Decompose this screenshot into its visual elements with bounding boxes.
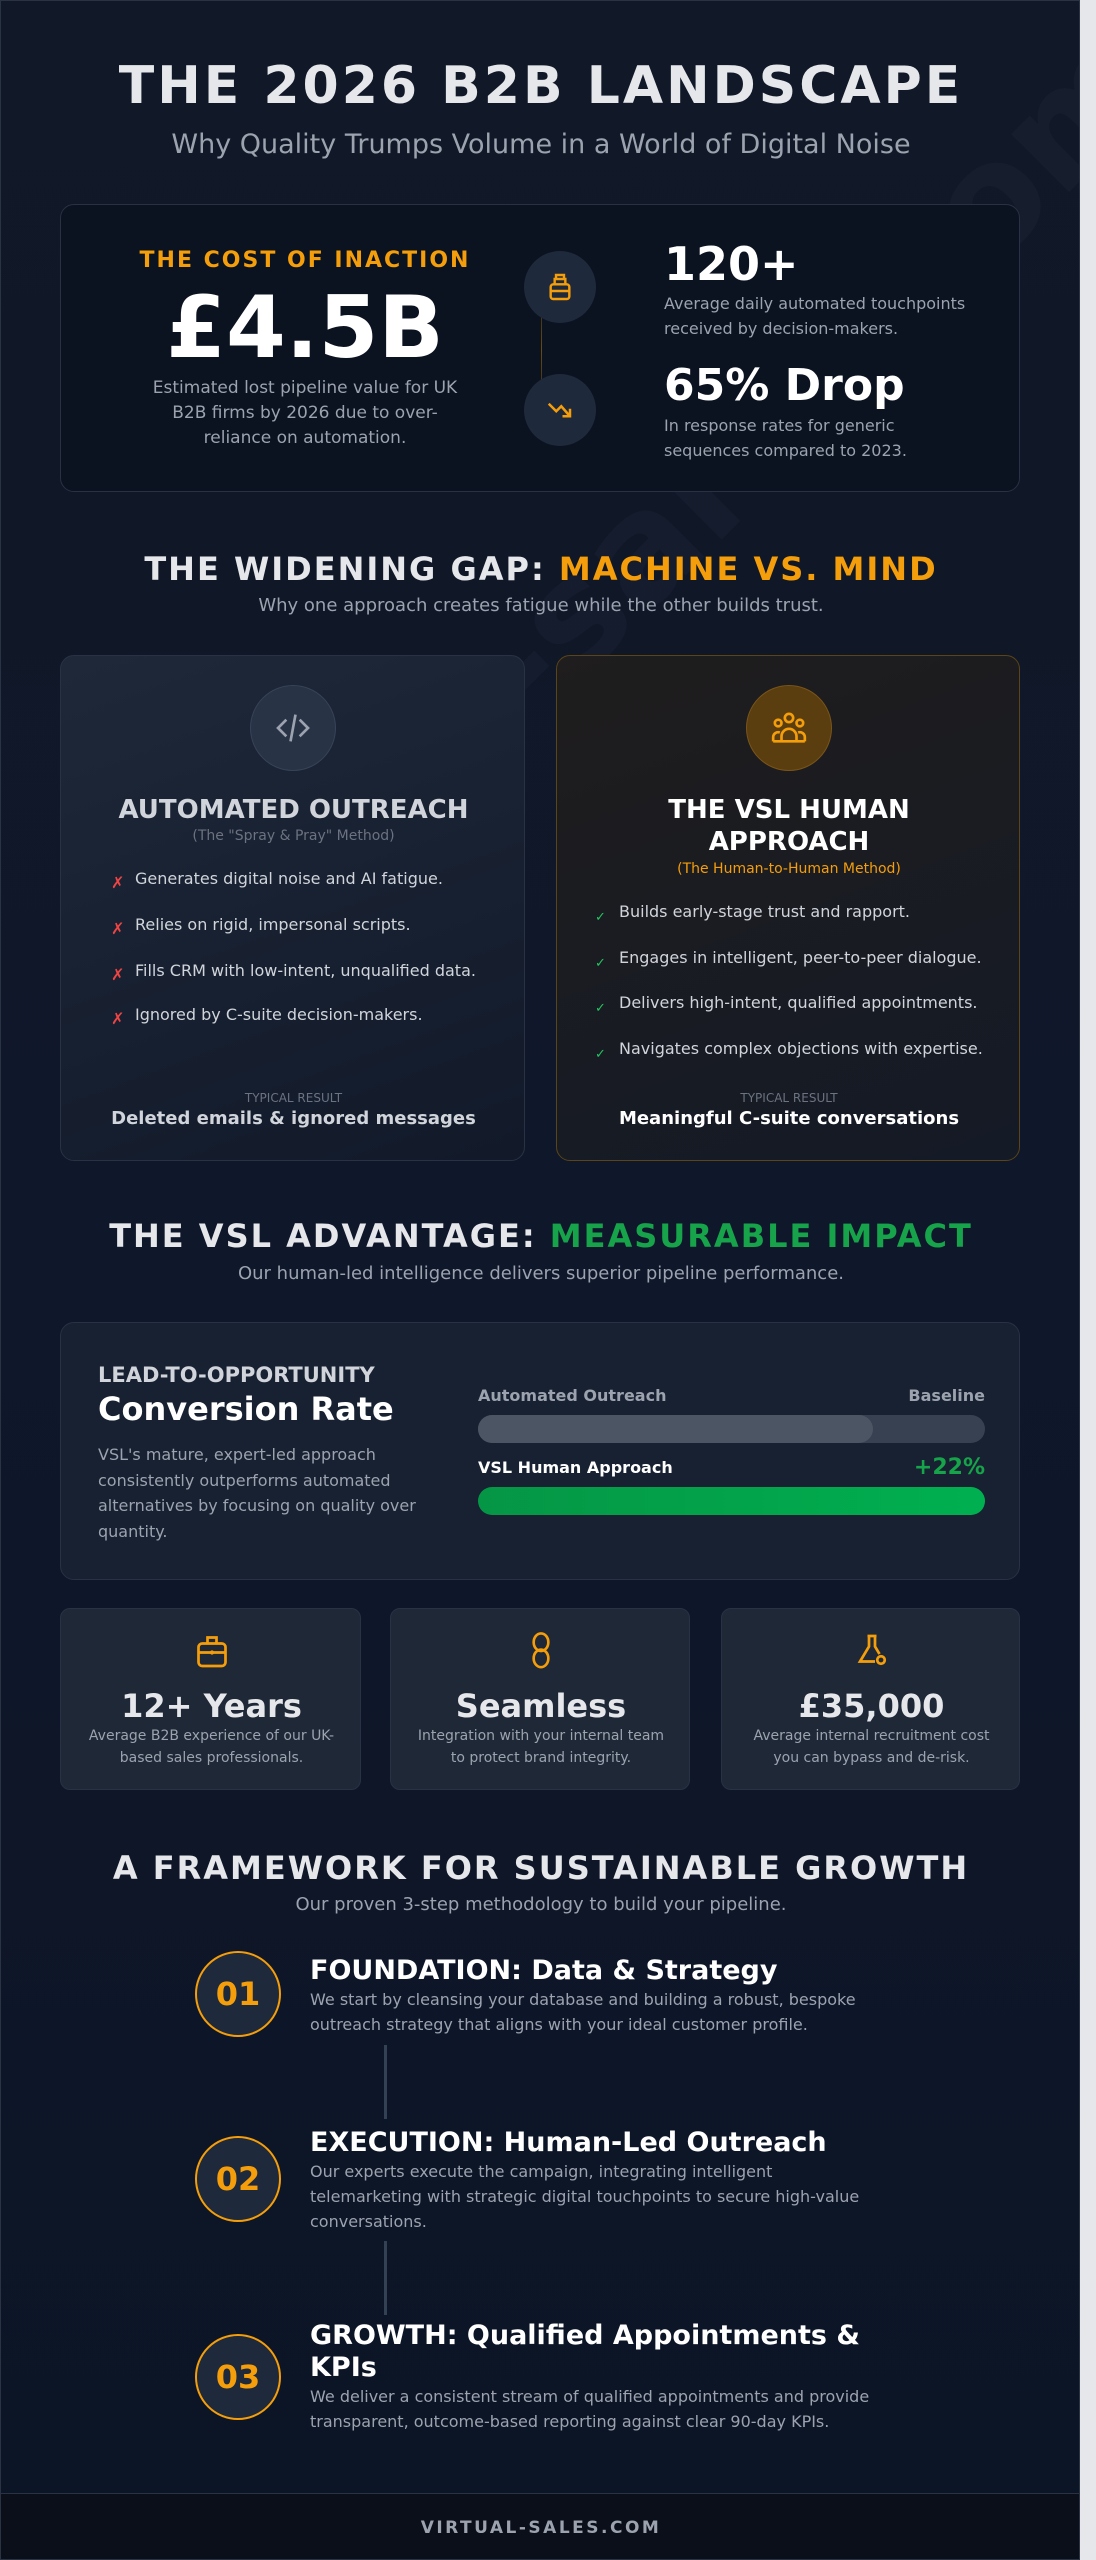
footer (1, 2493, 1081, 2560)
step 01: We start by cleansing your database and building a robust, bespoke outreach strategy that aligns with your ideal customer profile. (310, 1990, 856, 2034)
bullet list: Ignored by C-suite decision-makers. (135, 1005, 423, 1024)
check list: Navigates complex objections with expertise. (619, 1039, 983, 1058)
conversion text: LEAD-TO-OPPORTUNITY (98, 1363, 375, 1387)
conversion text: Conversion Rate (98, 1390, 394, 1428)
subheading: Our human-led intelligence delivers superior pipeline performance. (238, 1263, 844, 1284)
bar chart: +22% (914, 1455, 985, 1480)
stat: 120+: 120+ (664, 237, 799, 291)
check list: ✓ (595, 1047, 606, 1062)
bullet list (111, 869, 476, 1028)
icon: flask (858, 1634, 886, 1666)
badge 03: 03 (216, 2358, 260, 2396)
panel: VSL human approach: (The Human-to-Human Method) (677, 861, 901, 877)
big number: £4.5B (166, 278, 444, 378)
panel: conversion rate (60, 1322, 1020, 1580)
typical result: TYPICAL RESULT (245, 1091, 342, 1105)
panel: automated outreach (60, 655, 525, 1161)
badge 03 (195, 2334, 281, 2420)
subheading: Why one approach creates fatigue while the other builds trust. (258, 595, 824, 616)
bar chart: Baseline (908, 1386, 985, 1405)
badge 01: 01 (216, 1975, 260, 2013)
stat: 120+ (664, 237, 965, 338)
check list: ✓ (595, 1001, 606, 1016)
bullet list: Relies on rigid, impersonal scripts. (135, 915, 411, 934)
check list: Delivers high-intent, qualified appointments. (619, 993, 978, 1012)
card title (668, 795, 910, 857)
step 01 (195, 1951, 856, 2037)
stat card: years: Average B2B experience of our UK-based sales professionals. (89, 1728, 334, 1766)
stat card: recruitment cost: Average internal recruitment cost you can bypass and de-risk. (754, 1728, 989, 1766)
badge 02: 02 (216, 2160, 260, 2198)
conversion text: VSL's mature, expert-led approach consistently outperforms automated alternatives by focusing on quality over quantity. (98, 1445, 416, 1540)
step 03: GROWTH: Qualified Appointments & KPIs (310, 2320, 860, 2383)
icon: trend down (524, 374, 596, 446)
card title: THE VSL HUMAN (668, 795, 910, 825)
heading: framework: A FRAMEWORK FOR SUSTAINABLE GROWTH (113, 1849, 969, 1887)
step 02 (195, 2127, 859, 2231)
card title: APPROACH (709, 827, 869, 857)
bullet list: Generates digital noise and AI fatigue. (135, 869, 443, 888)
bullet list: Fills CRM with low-intent, unqualified data. (135, 961, 476, 980)
step 02: EXECUTION: Human-Led Outreach (310, 2127, 827, 2158)
cost label: THE COST OF INACTION (140, 248, 470, 273)
card title: AUTOMATED OUTREACH (118, 795, 469, 825)
step 02: Our experts execute the campaign, integrating intelligent telemarketing with strategic digital touchpoints to secure high-value conversations. (310, 2162, 859, 2231)
bullet list: ✗ (111, 965, 124, 984)
badge 02 (195, 2136, 281, 2222)
stat: 120+: Average daily automated touchpoints received by decision-makers. (664, 294, 965, 338)
badge 01 (195, 1951, 281, 2037)
heading: widening gap: THE WIDENING GAP: MACHINE VS. MIND (144, 550, 938, 588)
icon: link (532, 1632, 550, 1668)
subtitle: Why Quality Trumps Volume in a World of Digital Noise (171, 129, 911, 160)
heading: VSL advantage: THE VSL ADVANTAGE: MEASURABLE IMPACT (109, 1217, 973, 1255)
typical result (619, 1091, 959, 1129)
check list: Engages in intelligent, peer-to-peer dialogue. (619, 948, 982, 967)
bullet list: ✗ (111, 873, 124, 892)
typical result: Deleted emails & ignored messages (111, 1108, 476, 1129)
icon: inbox stack (524, 251, 596, 323)
step 01: FOUNDATION: Data & Strategy (310, 1955, 777, 1986)
subheading: Our proven 3-step methodology to build your pipeline. (295, 1894, 787, 1915)
footer: VIRTUAL-SALES.COM (421, 2518, 661, 2538)
stat: 65% drop: In response rates for generic sequences compared to 2023. (664, 416, 907, 460)
icon: briefcase (197, 1636, 227, 1668)
typical result (111, 1091, 476, 1129)
check list: Builds early-stage trust and rapport. (619, 902, 910, 921)
step 03 (195, 2320, 869, 2431)
stat: 65% drop: 65% Drop (664, 360, 905, 411)
typical result: Meaningful C-suite conversations (619, 1108, 959, 1129)
stat: 65% drop (664, 360, 907, 460)
bar chart (478, 1386, 985, 1515)
stat card: seamless (390, 1608, 690, 1790)
check list: ✓ (595, 956, 606, 971)
typical result: TYPICAL RESULT (740, 1091, 838, 1105)
stat card: seamless: Integration with your internal team to protect brand integrity. (418, 1728, 664, 1766)
title: THE 2026 B2B LANDSCAPE (119, 56, 963, 116)
stat card: years: 12+ Years (121, 1687, 302, 1725)
bullet list: ✗ (111, 1009, 124, 1028)
conversion text (98, 1363, 416, 1540)
check list (595, 902, 983, 1062)
stat card: recruitment cost: £35,000 (799, 1687, 944, 1725)
step 03: We deliver a consistent stream of qualified appointments and provide transparent, outcome-based reporting against clear 90-day KPIs. (310, 2387, 869, 2431)
check list: ✓ (595, 910, 606, 925)
panel: automated outreach: (The "Spray & Pray" Method) (192, 828, 395, 844)
cost description: Estimated lost pipeline value for UK B2B firms by 2026 due to over-reliance on automation. (153, 378, 457, 448)
bullet list: ✗ (111, 919, 124, 938)
bar chart: Automated Outreach (478, 1386, 666, 1405)
stat card: years (60, 1608, 361, 1790)
icon: code (250, 685, 336, 771)
icon: people (746, 685, 832, 771)
stat card: seamless: Seamless (456, 1687, 626, 1725)
panel: VSL human approach (556, 655, 1020, 1161)
stat card: recruitment cost (721, 1608, 1020, 1790)
panel: cost of inaction (60, 204, 1020, 492)
bar chart: VSL Human Approach (478, 1458, 673, 1477)
